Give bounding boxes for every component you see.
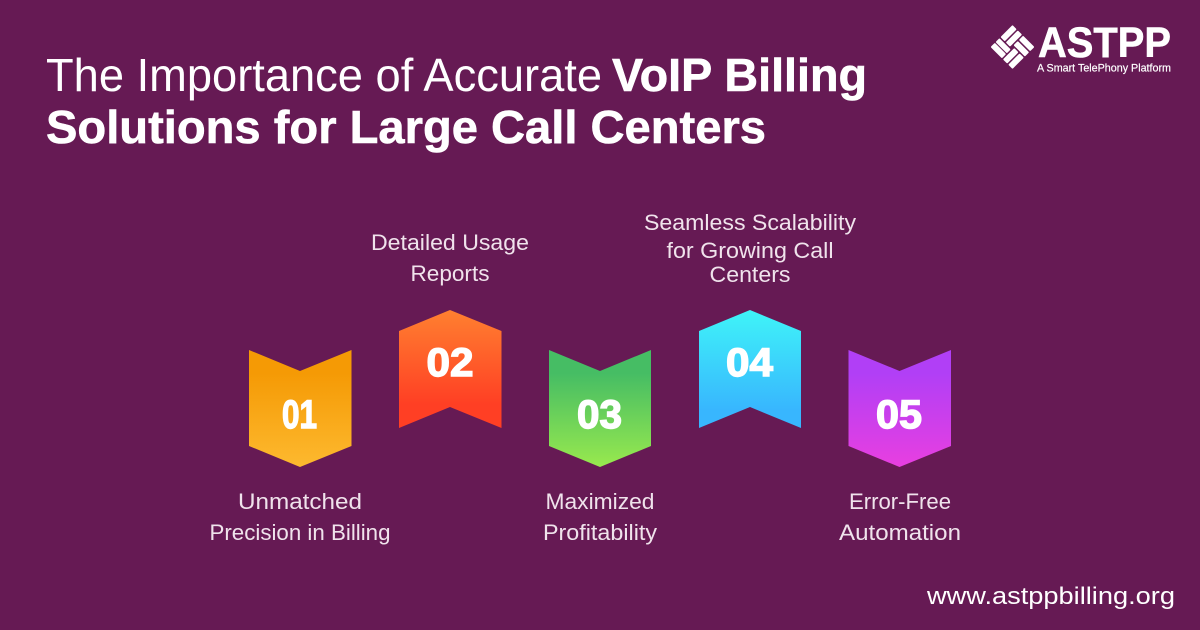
logo: ASTPP [991,19,1171,74]
label 04: Centers [710,262,790,287]
title [46,49,867,153]
step 02 [371,230,529,428]
logo wordmark: ASTPP [1038,19,1171,67]
badge 05 [848,350,951,467]
number 02: 02 [426,341,474,385]
badge 02 [399,310,502,428]
label 05: Error-Free [849,489,951,514]
number 01: 01 [282,393,317,437]
title: VoIP Billing [612,49,867,101]
number 03: 03 [577,393,622,437]
label 01: Precision in Billing [210,520,390,545]
number 04: 04 [726,341,774,385]
icon: woven diamond mark [991,25,1034,69]
label 02: Reports [410,261,490,286]
badge 04 [699,310,801,428]
website url: www.astppbilling.org [926,583,1175,610]
label 03: Maximized [546,489,654,514]
step 04 [644,210,856,428]
badge 01 [249,350,352,467]
number 05: 05 [876,393,922,437]
title: The Importance of Accurate [46,49,602,101]
label 03: Profitability [543,520,657,545]
logo tagline: A Smart TelePhony Platform [1037,62,1171,74]
label 01: Unmatched [238,489,362,514]
label 05: Automation [839,520,961,545]
title: Solutions for Large Call Centers [46,101,766,153]
step 05 [839,350,961,545]
step 01 [210,350,390,545]
badge 03 [549,350,651,467]
label 02: Detailed Usage [371,230,529,255]
label 04: for Growing Call [666,238,834,263]
label 04: Seamless Scalability [644,210,856,235]
step 03 [543,350,657,545]
